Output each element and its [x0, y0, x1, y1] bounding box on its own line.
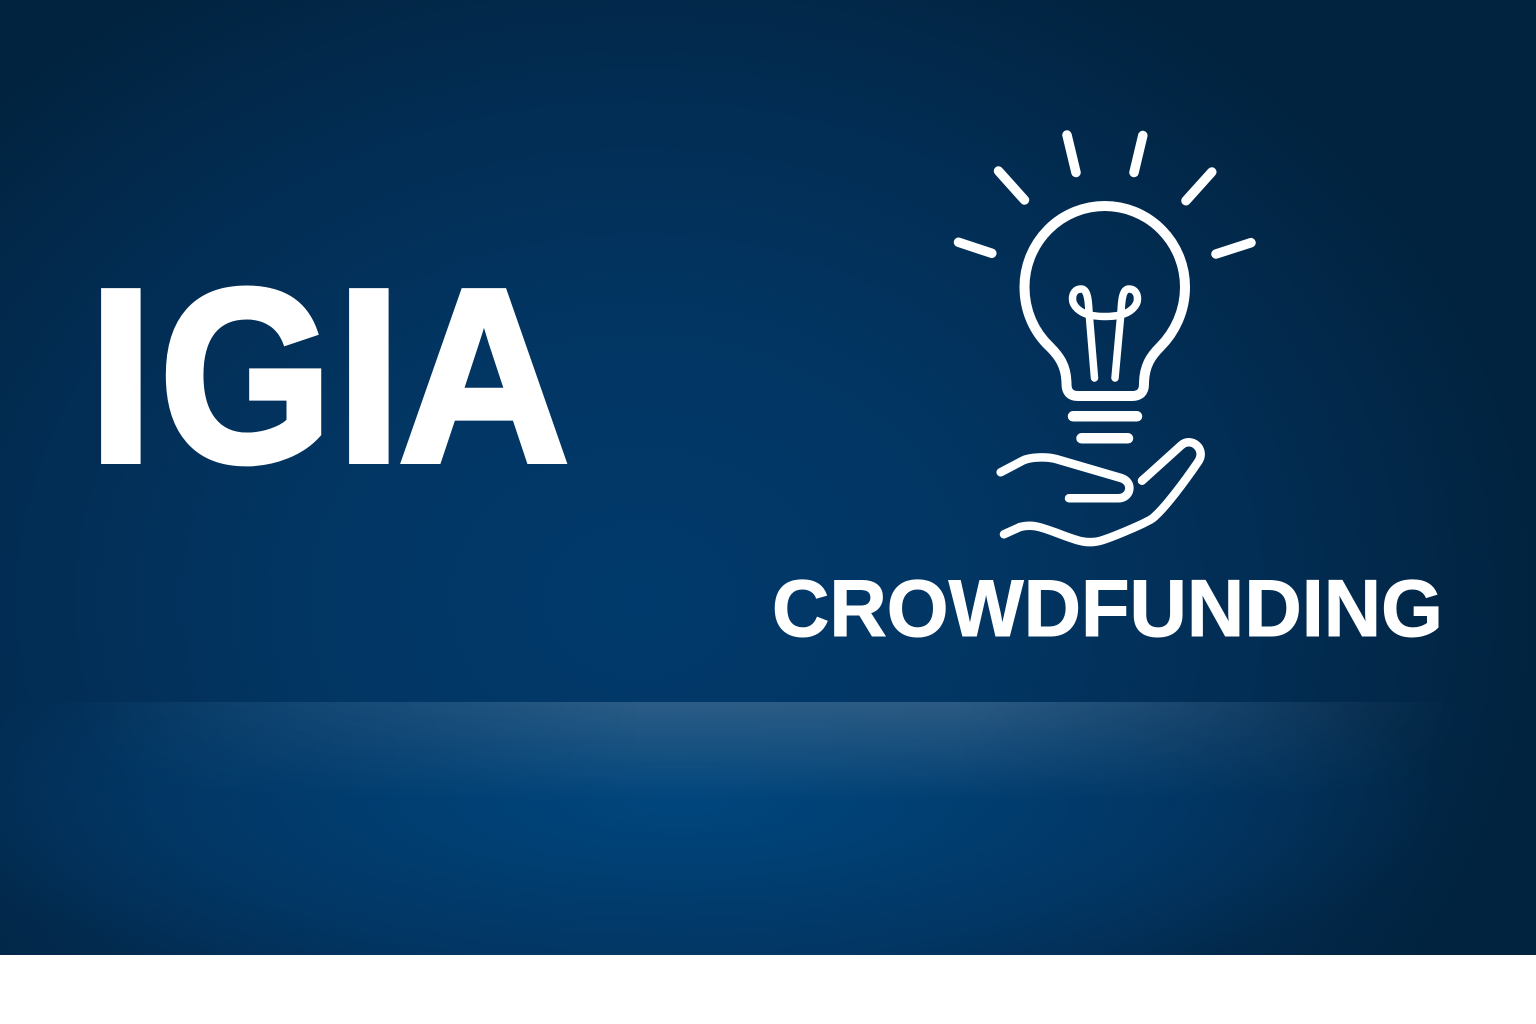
icon: open hand — [1001, 442, 1201, 542]
title: IGIA: G — [159, 237, 332, 514]
heading: CROWDFUNDING: CROWDFUNDING — [772, 564, 1443, 654]
panel: lower lighter band — [0, 702, 1536, 955]
title: IGIA: I — [88, 239, 153, 514]
title: IGIA: I — [336, 239, 401, 514]
icon: bulb filament — [1072, 289, 1138, 378]
icon: light bulb held above an open hand — [958, 135, 1251, 542]
title: IGIA: A — [398, 239, 570, 514]
icon: bulb outline — [1024, 206, 1185, 396]
icon: bulb base bars — [1073, 416, 1137, 438]
icon: light rays — [958, 135, 1251, 254]
title: IGIA — [88, 237, 570, 514]
